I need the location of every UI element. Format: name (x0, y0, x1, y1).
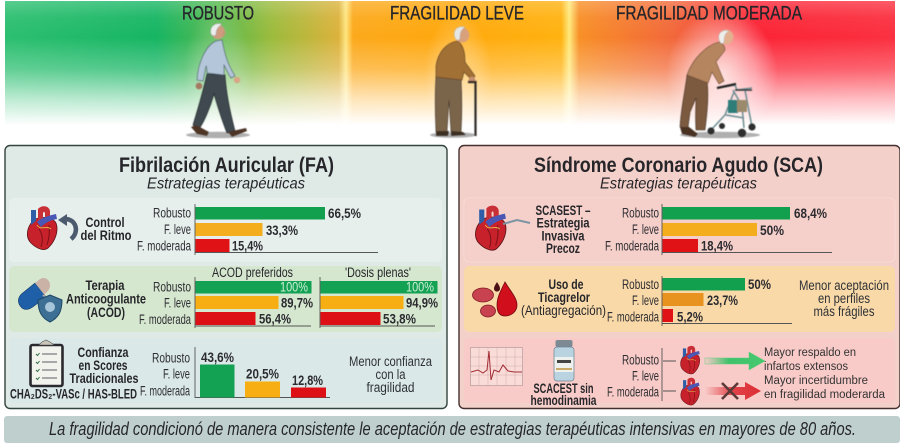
bar chart: F. leve (164, 222, 191, 237)
row: SCASEST invasiva (464, 198, 895, 262)
row: confianza en scores (9, 338, 442, 403)
bar chart: dosis plenas: 94,9% (406, 296, 438, 310)
row label: SCACEST sin (534, 381, 594, 396)
bar chart: Robusto (622, 277, 659, 292)
bar chart: 23,7% (707, 293, 738, 308)
bar chart: F. moderada (607, 310, 659, 324)
column chart: F. moderada (140, 384, 190, 398)
bar chart: dosis plenas (320, 265, 438, 328)
figure: frail man with cane (430, 27, 476, 138)
note: menor aceptación: más frágiles (814, 304, 875, 319)
bar chart: Robusto (153, 206, 191, 220)
bar chart: F. moderada (605, 238, 659, 254)
bar chart: ACOD preferidos: 56,4% (259, 312, 291, 326)
figure: frail man with walker (680, 30, 760, 138)
row label (66, 278, 146, 320)
row: SCACEST sin hemodinamia (464, 338, 895, 408)
row label: Invasiva (542, 228, 585, 244)
panel subtitle: FA: Estrategias terapéuticas (147, 176, 305, 192)
row label: Terapia (86, 278, 125, 293)
icon: medicine vial (554, 340, 574, 381)
column chart: F. leve (163, 366, 190, 382)
note: menor confianza: con la (376, 367, 406, 382)
row label: en Scores (78, 358, 128, 373)
bar chart: dosis plenas: 'Dosis plenas' (345, 265, 411, 280)
bar chart: F. leve (632, 293, 659, 308)
score names: CHA₂DS₂-VASc / HAS-BLED (10, 386, 137, 402)
bar chart: Robusto (622, 206, 659, 220)
row label (80, 215, 132, 243)
note: menor confianza (349, 354, 432, 395)
bar chart: dosis plenas: 100% (406, 280, 434, 294)
bar chart: F. moderada (137, 238, 191, 254)
bar chart: ACOD preferidos: 89,7% (281, 296, 313, 310)
bar chart: 68,4% (794, 206, 827, 221)
row label: del Ritmo (80, 228, 132, 243)
heading: robusto: ROBUSTO (182, 2, 254, 24)
bar chart: ACOD preferidos: 100% (280, 280, 308, 294)
callout: mayor respaldo: infartos extensos (764, 361, 848, 373)
panel: fibrilación auricular (5, 146, 447, 408)
outcome diagram (607, 346, 765, 405)
bar chart: ACOD preferidos (139, 265, 313, 328)
panel title: FA: Fibrilación Auricular (FA) (119, 153, 334, 177)
icon: heart with rhythm arrow (27, 206, 76, 250)
column chart (140, 347, 330, 398)
outcome diagram: F. moderada (607, 384, 659, 400)
bar chart: ACOD preferidos: F. leve (164, 296, 191, 310)
icon: clipboard checklist (30, 340, 62, 386)
row label (536, 203, 591, 256)
row: ticagrelor (464, 266, 895, 332)
column chart: Robusto (152, 350, 190, 366)
bar chart (607, 276, 792, 326)
bar chart: 5,2% (677, 310, 703, 324)
bar chart: ACOD preferidos: ACOD preferidos (212, 265, 293, 280)
bar chart: 15,4% (232, 238, 263, 254)
bar chart: dosis plenas: 53,8% (383, 312, 416, 326)
row label: Precoz (546, 241, 580, 256)
bar chart: 50% (748, 277, 771, 292)
bar chart: 50% (760, 223, 784, 238)
row label: (ACOD) (87, 305, 125, 320)
row label: Ticagrelor (538, 290, 591, 305)
arrow: red outcome with cross (705, 382, 761, 400)
row label (521, 277, 606, 318)
row label: Control (86, 215, 124, 230)
row: control del ritmo (9, 198, 442, 262)
icon: heart with catheter (475, 206, 530, 250)
row label: SCASEST – (536, 203, 591, 218)
row label: Tradicionales (70, 371, 138, 386)
icon: capsule and shield (18, 278, 62, 322)
column chart: 20,5% (246, 366, 279, 382)
heading: fragilidad leve: FRAGILIDAD LEVE (390, 2, 524, 24)
figure: robust man walking (186, 24, 250, 138)
bar chart: ACOD preferidos: F. moderada (139, 312, 191, 327)
callout: mayor incertidumbre: en fragilidad moderarda (764, 389, 886, 401)
callout: mayor respaldo (764, 347, 856, 373)
arrow: green outcome (705, 352, 765, 370)
bar chart: 18,4% (701, 238, 733, 254)
bar chart (137, 204, 378, 255)
bar chart: ACOD preferidos: Robusto (153, 280, 191, 294)
panel subtitle: SCA: Estrategias terapéuticas (600, 176, 757, 192)
note: menor aceptación (799, 278, 889, 319)
bar chart (605, 204, 832, 255)
row label: Anticoogulante (66, 292, 146, 306)
panel title: SCA: Síndrome Coronario Agudo (SCA) (534, 153, 823, 177)
row label: Uso de (548, 277, 584, 292)
row label: Estrategia (536, 216, 590, 230)
row: terapia anticoagulante (9, 265, 442, 332)
row label (70, 345, 138, 386)
outcome diagram: F. leve (632, 368, 659, 384)
row label: (Antiagregación) (521, 303, 606, 318)
column chart: 43,6% (201, 350, 234, 365)
panel: síndrome coronario agudo (459, 146, 900, 408)
column chart: 12,8% (292, 373, 323, 388)
bar chart: F. leve (632, 222, 659, 237)
callout: mayor incertidumbre: Mayor incertidumbre (764, 375, 868, 387)
row label: hemodinamia (530, 393, 597, 408)
bar chart: 66,5% (328, 206, 361, 221)
note: menor confianza: fragilidad (366, 380, 414, 395)
heading: fragilidad moderada: FRAGILIDAD MODERADA (616, 2, 802, 24)
note: menor confianza: Menor confianza (349, 354, 432, 369)
row label: Confianza (78, 345, 129, 360)
callout: mayor incertidumbre (764, 375, 886, 401)
bar chart: 33,3% (266, 223, 298, 238)
icon: blood cells and drop (472, 282, 517, 317)
note: menor aceptación: en perfiles (818, 291, 870, 306)
callout: mayor respaldo: Mayor respaldo en (764, 347, 856, 359)
outcome diagram: Robusto (622, 352, 659, 368)
row label (530, 381, 597, 408)
icon: ECG strip (470, 347, 523, 386)
